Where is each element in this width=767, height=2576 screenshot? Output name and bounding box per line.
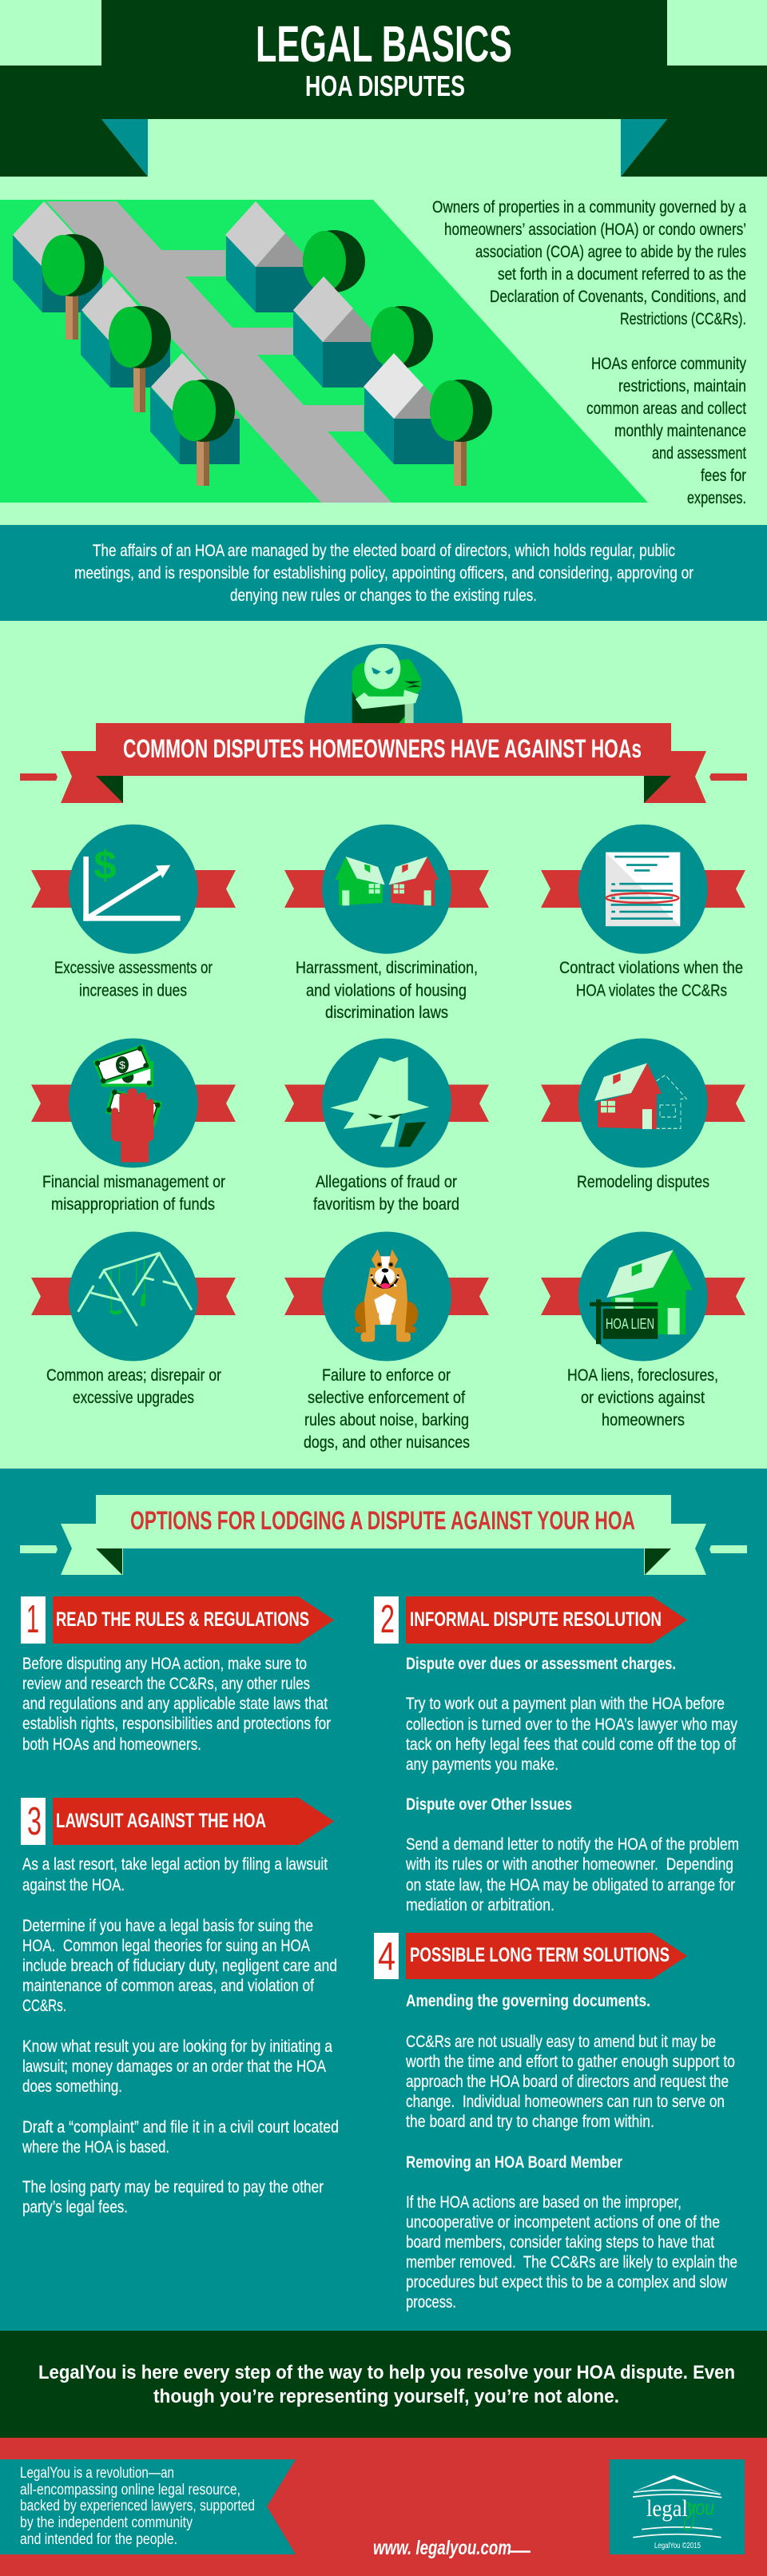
dispute: rule enforcement: rules about noise, barking (304, 1411, 469, 1429)
step 4 heading (374, 1933, 687, 1979)
step 4 text: process. (406, 2293, 456, 2312)
step 3 text (22, 1855, 339, 2216)
logo: LegalYou ©2015 (654, 2542, 701, 2550)
step 4 text (405, 1992, 737, 2312)
dispute: excessive assessments (31, 825, 236, 1000)
dispute: liens: or evictions against (581, 1389, 705, 1407)
dispute: fraud allegations: favoritism by the board (313, 1195, 459, 1214)
step 3 text: party’s legal fees. (22, 2198, 128, 2216)
dispute: rule enforcement (284, 1232, 489, 1452)
icon: hand with money (93, 1044, 162, 1163)
dispute: financial mismanagement: Financial mismanagement or (42, 1173, 225, 1191)
title: LEGAL BASICS (256, 15, 512, 73)
header ribbon (0, 0, 767, 177)
step 3 text: Know what result you are looking for by initiating a (22, 2037, 332, 2056)
subtitle: HOA DISPUTES (305, 70, 465, 102)
dispute: harassment (284, 825, 489, 1022)
step 2 heading: INFORMAL DISPUTE RESOLUTION (410, 1608, 662, 1631)
dispute: rule enforcement: selective enforcement of (308, 1389, 465, 1407)
ribbon: options heading (20, 1495, 747, 1575)
step 1 text: Before disputing any HOA action, make sure to (22, 1655, 307, 1673)
dispute: harassment: and violations of housing (306, 981, 467, 1000)
step 3 heading (21, 1798, 334, 1845)
illustration: neighborhood map (0, 200, 648, 503)
dispute: excessive assessments: increases in dues (79, 981, 187, 1000)
icon: angry homeowner (304, 644, 463, 723)
step 1 text (22, 1655, 331, 1754)
step 1 text: establish rights, responsibilities and protections for (22, 1715, 331, 1733)
dispute: financial mismanagement: misappropriation of funds (51, 1195, 215, 1214)
dispute: remodeling (541, 1039, 745, 1191)
footer about banner: backed by experienced lawyers, supported (20, 2498, 255, 2514)
step 4 text: Removing an HOA Board Member (406, 2153, 622, 2172)
step 3 text: include breach of fiduciary duty, negligent care and (22, 1957, 337, 1975)
step 3 text: As a last resort, take legal action by filing a lawsuit (22, 1855, 328, 1874)
panel: options section (0, 1469, 767, 2331)
dispute: excessive assessments: Excessive assessments or (54, 959, 213, 977)
dispute: rule enforcement: Failure to enforce or (322, 1366, 451, 1385)
panel: board of directors band (0, 525, 767, 621)
step 1 heading: 1 (26, 1598, 39, 1641)
step 3 text: HOA. Common legal theories for suing an HOA (22, 1937, 310, 1955)
step 4 heading: 4 (378, 1935, 395, 1978)
step 4 text: the board and try to change from within. (406, 2113, 654, 2131)
step 3 text: does something. (22, 2077, 122, 2096)
icon: shadowy figure in hat (330, 1057, 429, 1147)
icon: barking dog (355, 1249, 418, 1342)
step 4 text: Amending the governing documents. (406, 1992, 650, 2010)
icon: hand with money: $ (119, 1059, 126, 1071)
icon: house with lien sign (590, 1250, 693, 1344)
step 3 heading: 3 (27, 1800, 42, 1843)
dispute: liens: homeowners (602, 1411, 685, 1429)
step 2 text: Dispute over dues or assessment charges. (406, 1655, 676, 1673)
step 4 text: If the HOA actions are based on the improper, (406, 2193, 682, 2212)
footer about banner (0, 2459, 296, 2554)
step 3 text: Determine if you have a legal basis for suing the (22, 1917, 313, 1935)
step 2 heading (374, 1596, 687, 1644)
footer about banner: by the independent community (20, 2514, 193, 2531)
footer about banner: all-encompassing online legal resource, (20, 2482, 240, 2498)
logo (610, 2459, 745, 2554)
step 3 heading: LAWSUIT AGAINST THE HOA (56, 1810, 266, 1832)
dispute: harassment: discrimination laws (325, 1004, 448, 1022)
footer about banner: LegalYou is a revolution—an (20, 2465, 174, 2482)
dispute: contract violations: Contract violations when the (559, 959, 743, 977)
step 1 heading: READ THE RULES & REGULATIONS (56, 1608, 309, 1631)
dispute: rule enforcement: dogs, and other nuisances (304, 1433, 470, 1452)
dispute: liens: HOA liens, foreclosures, (567, 1366, 718, 1385)
dispute: financial mismanagement (31, 1039, 236, 1214)
website url: www. legalyou.com (373, 2537, 511, 2559)
intro text: fees for (701, 467, 746, 485)
step 2 text: Dispute over Other Issues (406, 1795, 572, 1814)
step 1 text: both HOAs and homeowners. (22, 1735, 201, 1754)
icon: rising chart (83, 843, 181, 921)
dispute: common areas: excessive upgrades (73, 1389, 194, 1407)
step 3 text: CC&Rs. (22, 1997, 66, 2015)
step 3 text: lawsuit; money damages or an order that the HOA (22, 2057, 326, 2076)
step 3 text: Draft a “complaint” and file it in a civil court located (22, 2118, 339, 2137)
intro text (432, 198, 746, 507)
ribbon: common disputes heading (20, 723, 747, 803)
dispute: harassment: Harrassment, discrimination, (296, 959, 478, 977)
dispute: contract violations (541, 825, 745, 1000)
dispute: common areas: Common areas; disrepair or (46, 1366, 221, 1385)
logo: legal (646, 2495, 688, 2522)
step 2 text: any payments you make. (406, 1755, 558, 1774)
panel: board of directors band: denying new rules or changes to the existing rules. (230, 586, 537, 605)
step 2 heading: 2 (380, 1598, 395, 1641)
dispute: contract violations: HOA violates the CC&Rs (576, 981, 727, 1000)
step 1 heading (21, 1596, 334, 1644)
step 3 text: against the HOA. (22, 1876, 125, 1894)
dispute: remodeling: Remodeling disputes (577, 1173, 709, 1191)
logo: you (686, 2495, 714, 2519)
step 4 heading: POSSIBLE LONG TERM SOLUTIONS (410, 1944, 670, 1966)
icon: feuding houses (335, 857, 439, 906)
sign label: HOA LIEN (606, 1316, 654, 1332)
footer about banner: and intended for the people. (20, 2531, 177, 2548)
step 2 text (405, 1655, 739, 1914)
dispute: common areas (31, 1232, 236, 1407)
step 2 text: mediation or arbitration. (406, 1896, 554, 1914)
icon: contract document (606, 853, 680, 926)
callout: LegalYou message (0, 2331, 767, 2438)
step 3 text: maintenance of common areas, and violation of (22, 1977, 314, 1995)
icon: broken swing set (78, 1253, 191, 1325)
dispute: liens (541, 1232, 745, 1429)
intro text: expenses. (687, 489, 746, 507)
dispute: fraud allegations (284, 1039, 489, 1214)
panel: footer (0, 2438, 767, 2576)
dispute: fraud allegations: Allegations of fraud or (316, 1173, 457, 1191)
step 3 text: where the HOA is based. (22, 2138, 169, 2157)
step 1 text: and regulations and any applicable state laws that (22, 1695, 328, 1713)
step 1 text: review and research the CC&Rs, any other rules (22, 1675, 310, 1693)
step 3 text: The losing party may be required to pay the other (22, 2178, 324, 2196)
icon: rising chart: $ (93, 843, 117, 888)
callout: LegalYou message: though you’re representing yourself, you’re not alone. (153, 2386, 619, 2407)
icon: house with dashed extension (594, 1063, 686, 1129)
